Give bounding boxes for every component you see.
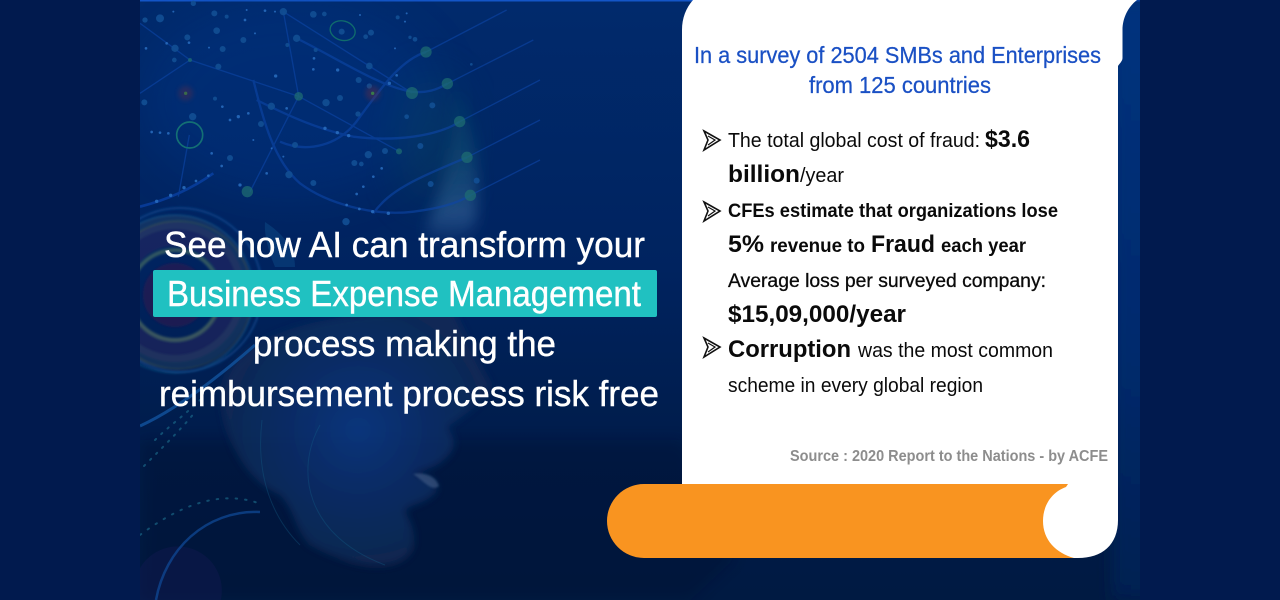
infographic canvas bbox=[140, 0, 1140, 600]
fact 2: revenue lost: 5% bbox=[728, 231, 764, 258]
fact 4: corruption: Corruption bbox=[728, 336, 851, 363]
headline block bbox=[153, 224, 659, 414]
right side shading bbox=[1111, 0, 1140, 599]
fact 4: corruption: was the most common bbox=[857, 340, 1053, 362]
fact 1: global cost of fraud: $3.6 bbox=[985, 126, 1030, 153]
teal ellipse node bbox=[330, 20, 356, 42]
fact 1: global cost of fraud: The total global cost of fraud: bbox=[728, 130, 980, 152]
scattered network dots bbox=[141, 1, 480, 225]
fact 1: global cost of fraud bbox=[728, 126, 1030, 188]
bottom purple circle bbox=[140, 546, 222, 600]
heading line 1: In a survey of 2504 SMBs and Enterprises bbox=[694, 42, 1101, 68]
fact 2: revenue lost: Fraud bbox=[871, 231, 935, 258]
fact list bbox=[728, 126, 1058, 397]
concentric rings bbox=[140, 206, 261, 374]
fact 2: revenue lost: revenue to bbox=[770, 236, 865, 257]
red glow nodes bbox=[178, 86, 380, 101]
darker lower-left shadow bbox=[146, 446, 708, 560]
soft glow of neural area bbox=[157, 0, 420, 190]
forehead light streak bbox=[426, 116, 482, 240]
white stats panel bbox=[682, 0, 1137, 558]
central background panel bbox=[140, 0, 1140, 600]
fact 3: average loss: $15,09,000/year bbox=[728, 301, 906, 328]
headline line 3: process making the bbox=[253, 323, 556, 364]
teal side glow bbox=[412, 107, 446, 179]
neural network drawn in zoomed coordinates bbox=[140, 1, 540, 225]
fact 1: global cost of fraud: /year bbox=[800, 165, 844, 187]
headline line 1: See how AI can transform your bbox=[164, 224, 645, 265]
bottom arc bbox=[156, 512, 260, 600]
heading line 2: from 125 countries bbox=[809, 72, 991, 98]
fact 4: corruption bbox=[728, 336, 1053, 397]
fact 3: average loss bbox=[728, 270, 1046, 328]
lip highlight bbox=[413, 474, 439, 488]
dotted bottom arc bbox=[140, 498, 258, 535]
fact 3: average loss: Average loss per surveyed company: bbox=[728, 270, 1046, 292]
icon: arrow bullet 1 bbox=[704, 131, 720, 150]
headline line 2: Business Expense Management bbox=[167, 273, 641, 314]
fact 2: revenue lost bbox=[728, 201, 1058, 258]
teal ring node bbox=[177, 122, 203, 148]
top edge line bbox=[140, 0, 1140, 2]
source note: Source : 2020 Report to the Nations - by ACFE bbox=[790, 448, 1108, 465]
panel heading bbox=[694, 42, 1101, 98]
icon: arrow bullet 2 bbox=[704, 202, 720, 221]
teal highlight box bbox=[153, 270, 657, 317]
icon: arrow bullet 3 bbox=[704, 338, 720, 357]
fact 1: global cost of fraud: billion bbox=[728, 161, 800, 188]
fact 2: revenue lost: CFEs estimate that organizations lose bbox=[728, 201, 1058, 222]
dotted left swoosh bbox=[144, 400, 200, 466]
left swoosh bbox=[140, 345, 255, 426]
fact 2: revenue lost: each year bbox=[941, 236, 1027, 257]
small bright dots bbox=[145, 9, 408, 215]
network lines bbox=[140, 10, 540, 213]
fact 4: corruption: scheme in every global region bbox=[728, 375, 983, 397]
head silhouette bbox=[222, 310, 490, 566]
orange scroll bar bbox=[607, 484, 1074, 558]
face contour lines bbox=[261, 420, 385, 565]
large glowing nodes bbox=[188, 46, 476, 201]
headline line 4: reimbursement process risk free bbox=[159, 373, 659, 414]
blue blob beside rings bbox=[265, 222, 295, 267]
